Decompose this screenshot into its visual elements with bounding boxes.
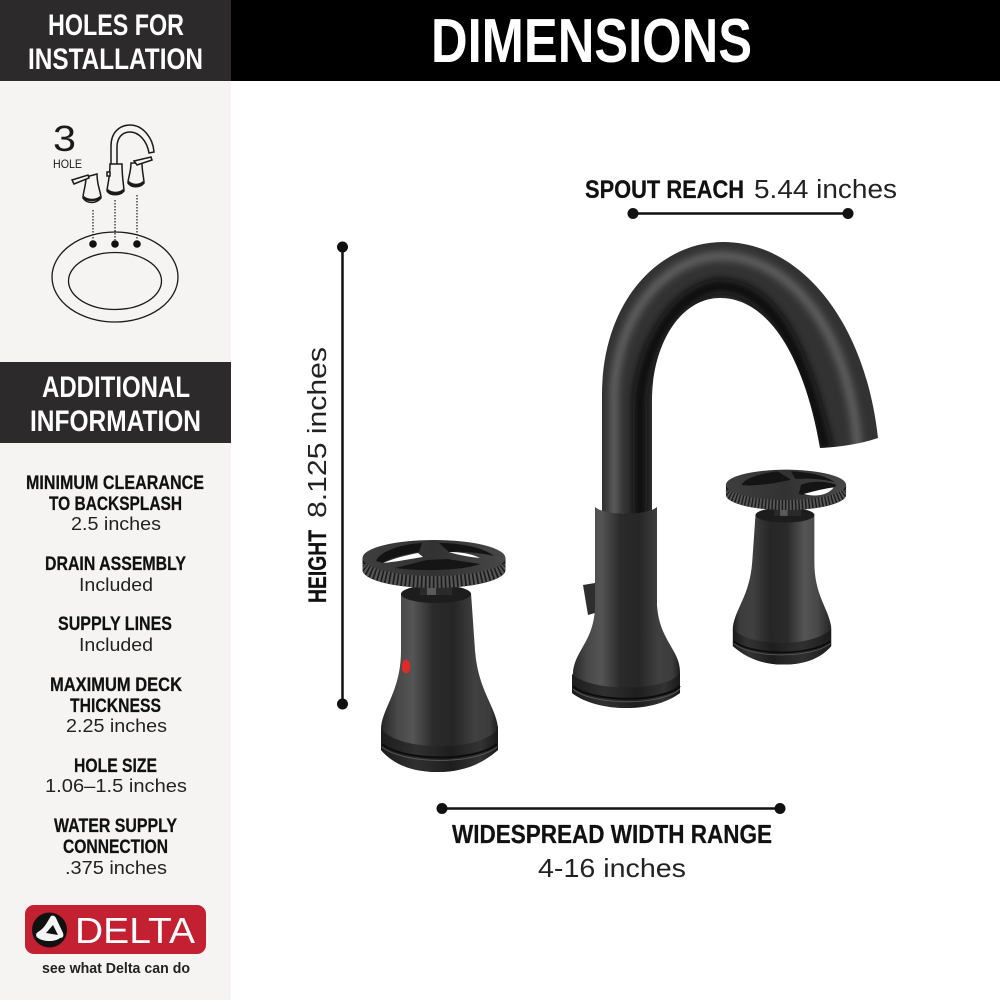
icon: mini faucet <box>72 125 154 202</box>
dimension: height: HEIGHT <box>304 530 332 603</box>
spec: minimum clearance: MINIMUM CLEARANCE <box>26 472 204 494</box>
dimension: widespread width range <box>436 803 786 883</box>
dimension: spout reach: 5.44 inches <box>754 176 897 204</box>
heading: additional information: INFORMATION <box>30 405 201 438</box>
logo: delta: see what Delta can do <box>42 961 190 977</box>
heading: additional information: ADDITIONAL <box>42 371 190 404</box>
spec: water supply connection: WATER SUPPLY <box>54 815 177 837</box>
icon: sink basin <box>52 232 178 322</box>
dimension: spout reach: SPOUT REACH <box>585 176 744 204</box>
left cross handle <box>360 540 508 772</box>
dotted guide lines <box>93 195 137 240</box>
spec: supply lines: SUPPLY LINES <box>58 613 172 635</box>
heading: holes for installation: INSTALLATION <box>28 43 203 76</box>
diagram: three hole sink installation <box>52 118 178 322</box>
right cross handle <box>724 470 848 665</box>
spec: minimum clearance <box>26 472 204 534</box>
spec: maximum deck thickness: 2.25 inches <box>66 715 167 736</box>
dimension: height: 8.125 inches <box>304 347 332 518</box>
dimension: widespread width range: 4-16 inches <box>538 853 686 883</box>
spec: hole size: 1.06–1.5 inches <box>45 775 187 796</box>
title banner <box>231 0 1000 81</box>
title banner: DIMENSIONS <box>431 7 752 76</box>
spec: water supply connection <box>54 815 177 878</box>
heading: holes for installation: HOLES FOR <box>48 9 184 42</box>
label: 3 hole <box>53 118 82 171</box>
faucet spout <box>602 242 878 520</box>
spec: drain assembly <box>45 553 186 595</box>
logo: delta: DELTA <box>75 910 195 951</box>
spec: hole size: HOLE SIZE <box>74 755 157 777</box>
spec: supply lines <box>58 613 172 655</box>
spec: maximum deck thickness <box>50 674 182 736</box>
left sidebar panel <box>0 81 231 1000</box>
spec: water supply connection: CONNECTION <box>63 836 168 858</box>
label: 3 hole: 3 <box>53 118 76 159</box>
spec: water supply connection: .375 inches <box>65 857 167 878</box>
hot indicator dot <box>402 660 410 674</box>
spec: maximum deck thickness: THICKNESS <box>70 695 161 717</box>
dimension: height <box>304 242 348 710</box>
dimension: widespread width range: WIDESPREAD WIDTH RANGE <box>452 819 772 849</box>
faucet base <box>572 507 680 708</box>
spec: hole size <box>45 755 187 796</box>
spec: minimum clearance: TO BACKSPLASH <box>49 493 182 515</box>
heading: additional information <box>0 362 231 443</box>
heading: holes for installation <box>0 0 231 81</box>
spec: minimum clearance: 2.5 inches <box>71 513 161 534</box>
spec: maximum deck thickness: MAXIMUM DECK <box>50 674 182 696</box>
label: 3 hole: HOLE <box>53 157 82 171</box>
spec: supply lines: Included <box>79 634 153 655</box>
spec: drain assembly: DRAIN ASSEMBLY <box>45 553 186 575</box>
spec: drain assembly: Included <box>79 574 153 595</box>
logo: delta <box>25 905 206 977</box>
dimension: spout reach <box>585 176 897 219</box>
